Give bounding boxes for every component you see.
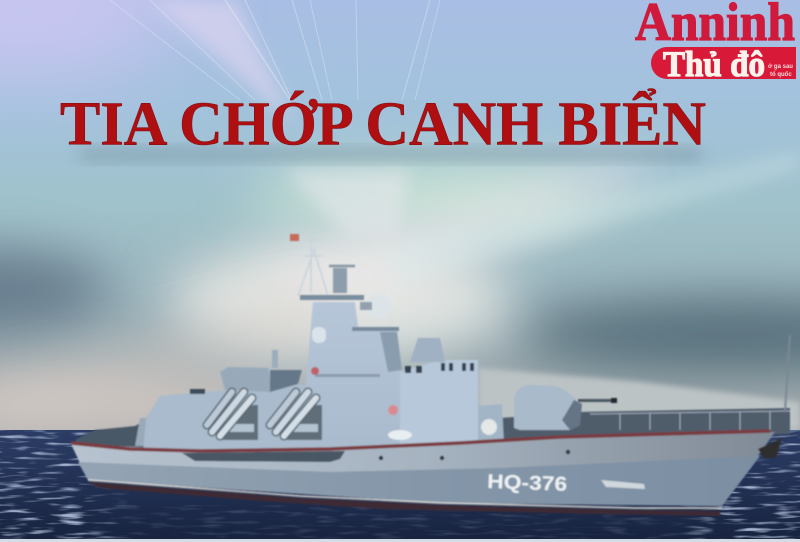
hull [71,431,782,516]
far-side bow railing and mast [500,335,790,442]
logo: An ninh Thủ đô: Thủ đô [663,44,765,84]
ship's boat [182,451,345,462]
warship HQ-376 [71,226,790,516]
red deck edge [71,431,770,451]
boot topping [88,480,722,508]
missile launchers [207,392,322,440]
stern deck clutter [75,418,152,450]
superstructure [143,294,504,452]
window row [405,363,474,373]
forward deckhouse [400,360,478,448]
launcher 2 [270,392,322,440]
main gun turret [514,385,617,430]
sensor [190,389,205,394]
white forward dome [481,419,497,435]
sea [0,420,800,542]
hull number: HQ-376 [487,471,568,496]
logo: An ninh Thủ đô: ở ga sau [768,64,793,70]
rear deckhouse [143,367,320,452]
logo red pill [651,47,796,79]
small hull fitting [601,480,645,489]
aft bridge [270,370,302,392]
light rays [110,0,440,235]
launcher 1 [207,392,258,440]
anchor [758,438,782,458]
title: TIA CHỚP CANH BIỂN [60,90,706,158]
mast and radar [290,226,355,296]
main tower [300,302,408,450]
white life raft [388,430,412,440]
logo: An ninh Thủ đô [635,0,796,84]
logo: An ninh Thủ đô: tổ quốc [770,71,792,78]
title shadow [80,150,700,159]
low cloud bank on the right [478,368,800,430]
radar dome [366,294,392,318]
